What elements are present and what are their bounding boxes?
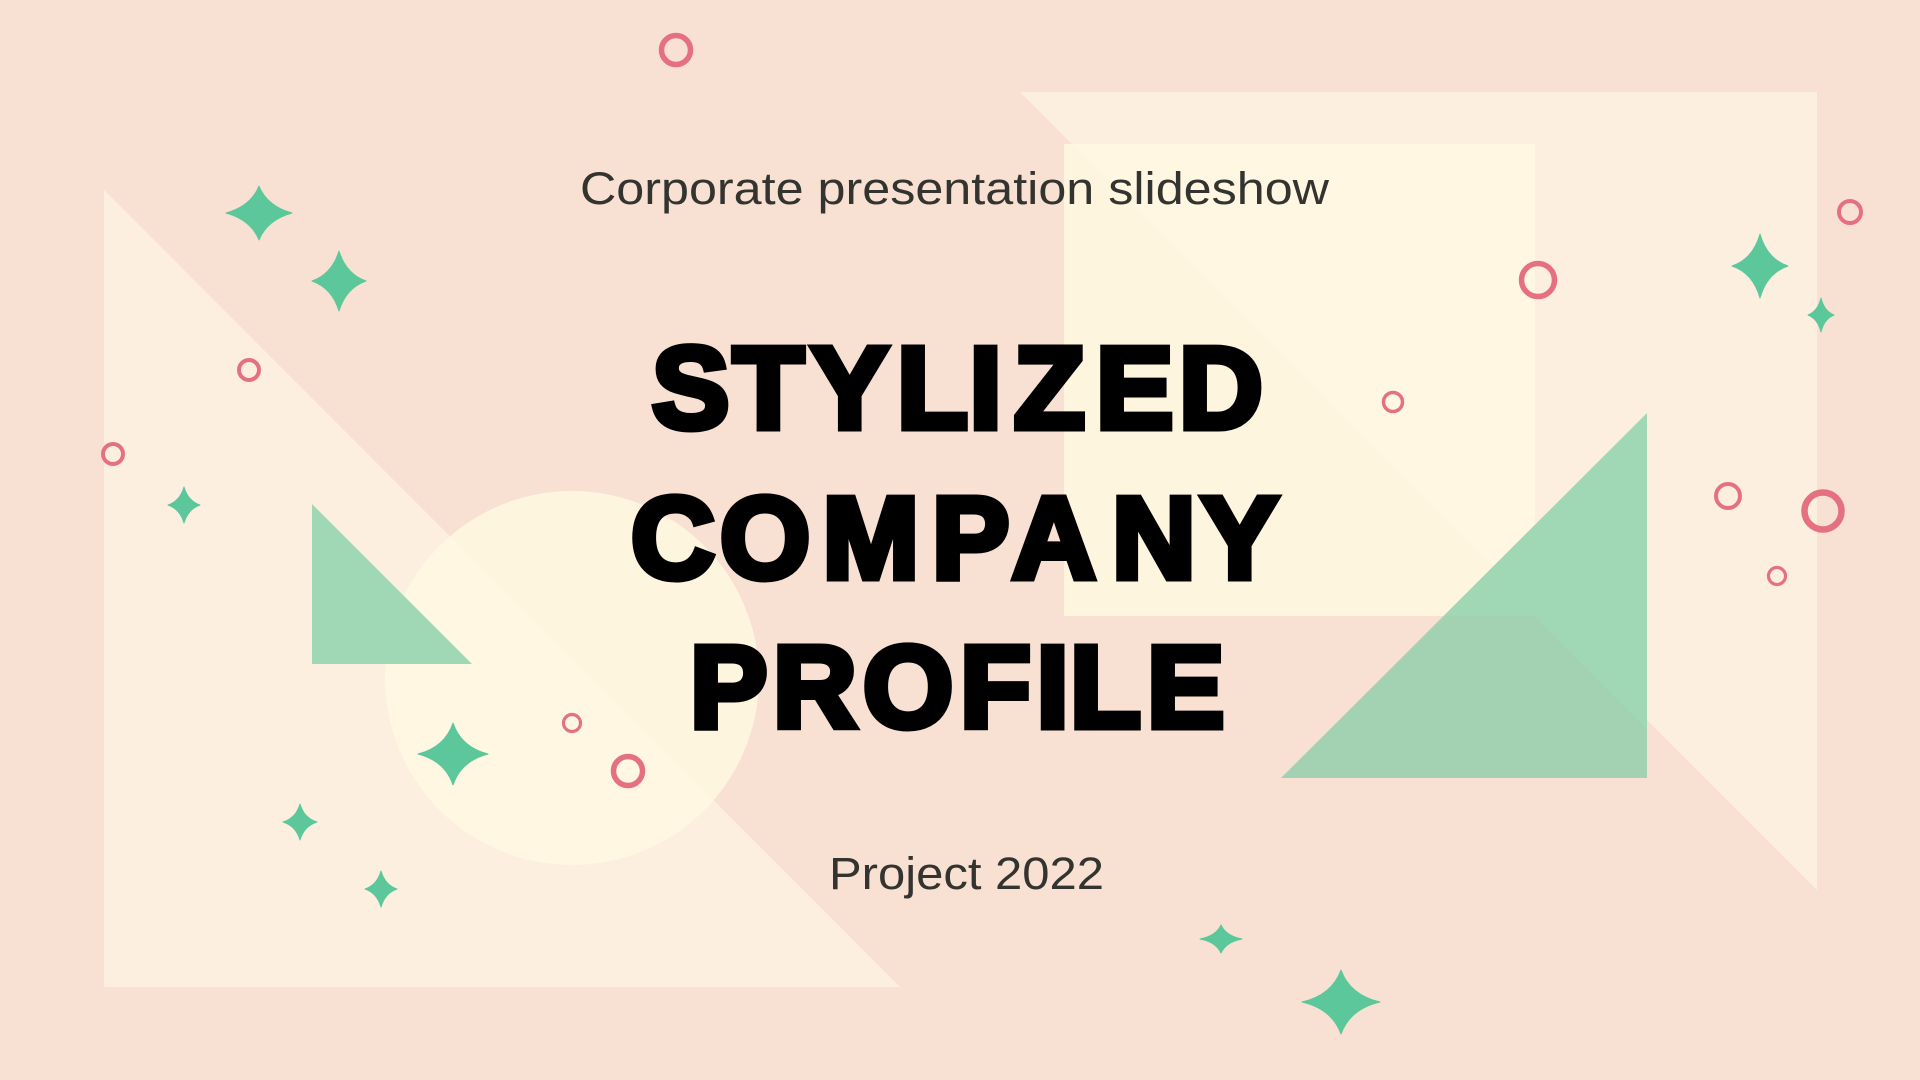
- background shape: large right triangle: [1020, 92, 1817, 890]
- title: [631, 323, 1278, 752]
- decorative green sparkles: [168, 186, 1834, 1034]
- title: COMPANY: [631, 473, 1278, 603]
- background shape: pale circle: [385, 491, 759, 865]
- decorative pink rings: [103, 36, 1861, 786]
- title: PROFILE: [690, 622, 1224, 752]
- background shape: large left triangle: [104, 190, 900, 987]
- green triangle: small left: [312, 504, 472, 664]
- subtitle: Corporate presentation slideshow: [580, 163, 1330, 214]
- project year: Project 2022: [829, 848, 1104, 899]
- green triangle overlap area: [1281, 616, 1647, 778]
- background shape: pale square: [1064, 144, 1535, 616]
- green triangle: large right: [1281, 413, 1647, 778]
- title: STYLIZED: [652, 323, 1263, 453]
